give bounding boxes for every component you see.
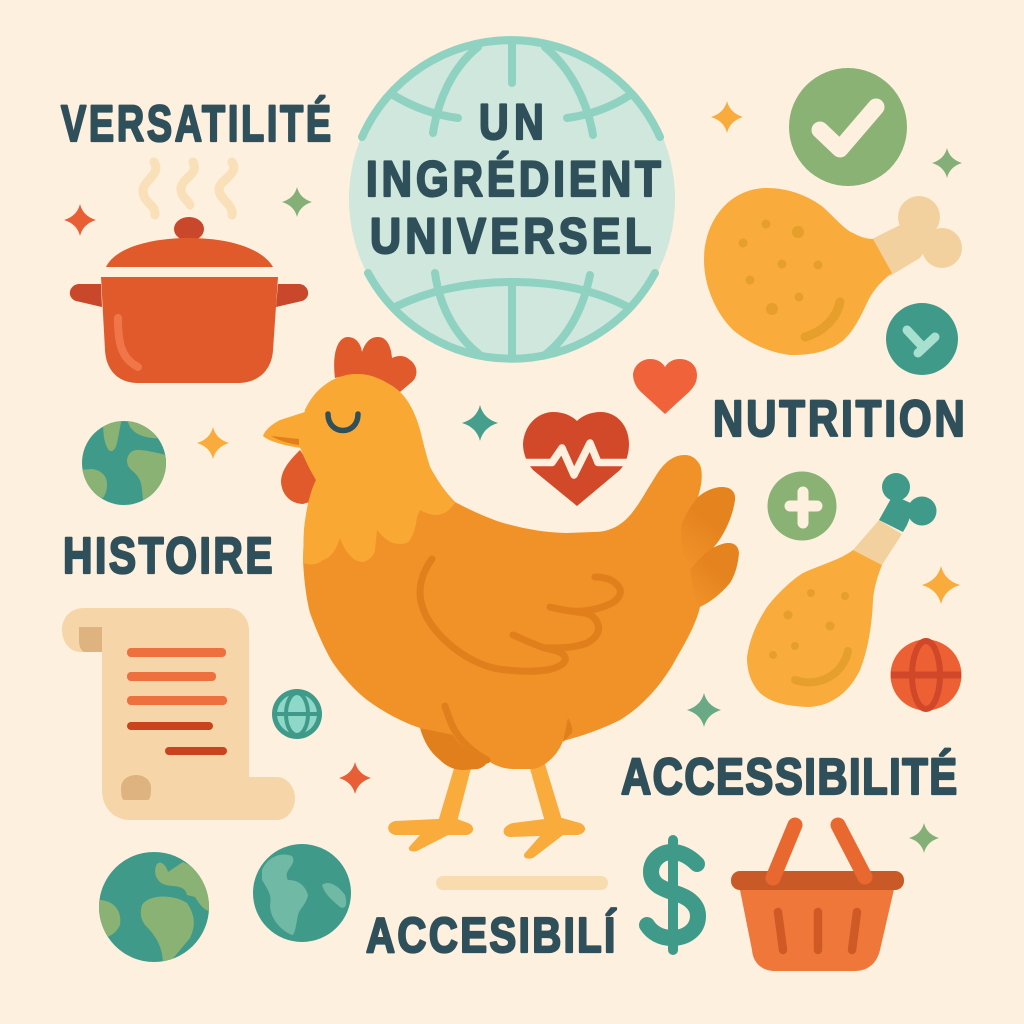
hen neck hood	[300, 374, 455, 564]
central globe with title	[349, 36, 675, 362]
heading: nutrition: NUTRITION	[713, 390, 965, 447]
icon: small wireframe globe	[272, 689, 322, 739]
sparkle: orange right	[922, 566, 960, 604]
title: UNIVERSEL	[370, 208, 651, 264]
icon: drumstick top	[704, 188, 962, 355]
sparkle: orange top right	[711, 101, 743, 133]
icon: cooking pot	[70, 217, 308, 383]
hen body	[300, 374, 702, 769]
heading: versatilité: VERSATILITÉ	[61, 94, 331, 152]
sparkle: green near pot	[282, 187, 312, 217]
title: INGRÉDIENT	[366, 151, 661, 207]
icon: earth with green land	[96, 852, 212, 962]
icon: small earth left	[82, 421, 166, 505]
hen beak	[263, 412, 305, 448]
sparkle: orange left	[197, 427, 229, 459]
shadow under hen	[436, 876, 608, 890]
hen legs and feet	[388, 764, 585, 859]
icon: red globe	[890, 640, 962, 710]
icon: shopping basket	[731, 825, 904, 971]
scroll text lines	[127, 648, 227, 755]
illustration: hen	[263, 337, 739, 859]
sparkle: green top right	[932, 148, 962, 178]
hen eye	[328, 414, 358, 430]
sparkle: red bottom left	[339, 762, 371, 794]
heading: accessibilité: ACCESSIBILITÉ	[621, 748, 957, 805]
icon: parchment scroll	[62, 608, 295, 820]
icon: earth teal	[253, 844, 351, 942]
sparkle: teal	[462, 405, 498, 441]
hen wattle	[281, 450, 320, 504]
icon: heart with pulse	[523, 412, 632, 506]
title	[366, 94, 661, 264]
hen tail feathers	[681, 487, 739, 607]
heading: accesibilí: ACCESIBILÍ	[366, 908, 617, 963]
icon: heart	[633, 359, 697, 414]
icon: dollar sign	[647, 840, 698, 950]
icon: plus badge	[768, 472, 836, 540]
sparkle: green right	[687, 693, 721, 727]
hen comb	[334, 337, 416, 392]
icon: steam	[143, 162, 234, 215]
heading: histoire: HISTOIRE	[63, 527, 273, 584]
sparkle: red near pot	[64, 204, 96, 236]
icon: teal badge	[886, 303, 958, 375]
hen thigh	[420, 728, 488, 770]
icon: check badge	[789, 68, 907, 186]
hen wing	[420, 559, 620, 760]
title: UN	[479, 94, 544, 150]
sparkle: green bottom right	[909, 823, 939, 853]
icon: drumstick lower	[747, 473, 936, 707]
